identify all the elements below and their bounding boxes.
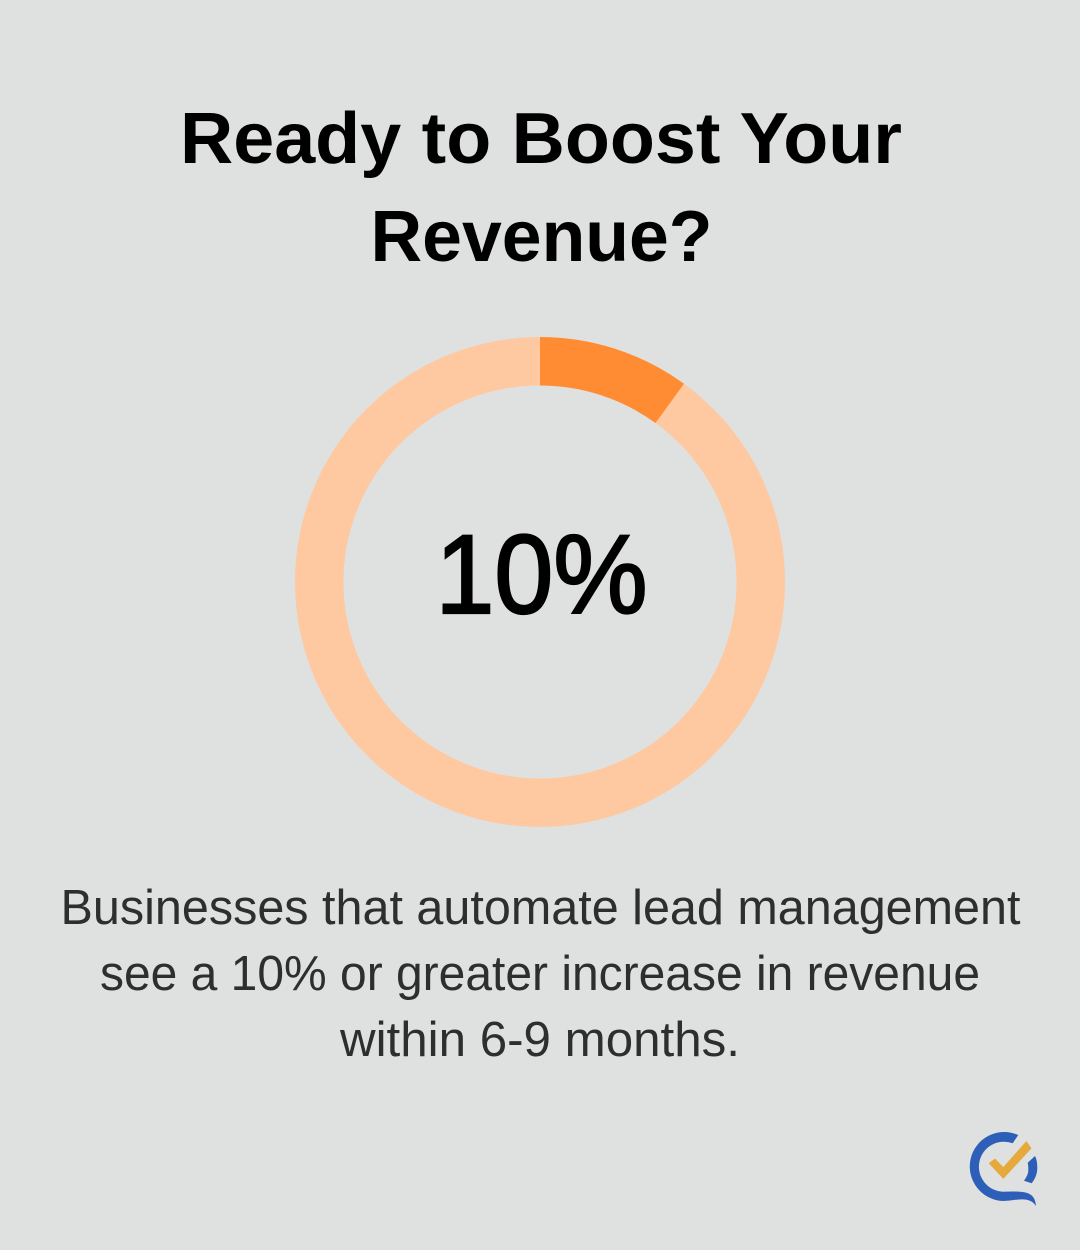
title (180, 99, 902, 277)
donut highlighted segment (540, 337, 684, 423)
icon: logo speech bubble with check mark (970, 1132, 1037, 1206)
title: Revenue? (370, 197, 712, 277)
logo bubble right arc (1024, 1156, 1037, 1183)
description text: see a 10% or greater increase in revenue (100, 947, 980, 1001)
donut value: 10% (436, 512, 648, 637)
description text: within 6-9 months. (339, 1013, 740, 1067)
description text: Businesses that automate lead management (60, 881, 1021, 935)
logo check mark (989, 1142, 1031, 1178)
donut track (319, 361, 761, 803)
title: Ready to Boost Your (180, 99, 902, 179)
logo bubble ring (970, 1132, 1036, 1206)
description text (60, 881, 1021, 1067)
donut chart: 10% (319, 337, 761, 803)
